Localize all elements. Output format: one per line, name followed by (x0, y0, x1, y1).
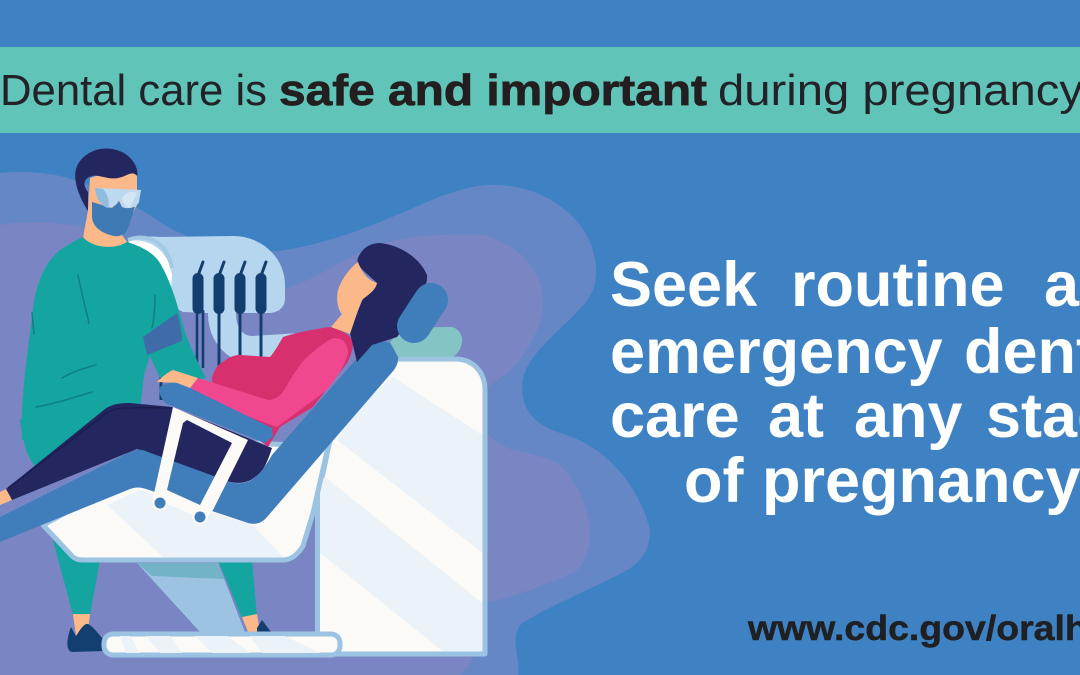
background blob: outer (0, 172, 650, 675)
main message (610, 250, 1080, 516)
patient hair (350, 243, 427, 362)
banner text: bold emphasis: safe and important (279, 66, 707, 115)
line 4: pregnancy (762, 446, 1080, 516)
foot plate (104, 634, 340, 655)
line 2: emergency (610, 317, 943, 387)
banner (0, 47, 1080, 133)
armrest frame (152, 407, 248, 524)
line 4: of (684, 446, 744, 516)
headrest (414, 300, 431, 326)
patient face (331, 262, 377, 334)
hair (75, 148, 137, 211)
dentist hand (157, 370, 198, 388)
background blob: inner (0, 222, 590, 675)
dentist legs (53, 540, 271, 652)
patient torso (212, 327, 353, 447)
chair cushion and backrest (0, 341, 398, 542)
teal scrub top (22, 237, 206, 440)
chair seat (43, 440, 328, 560)
armrest pad (160, 383, 273, 443)
line 1: routine (791, 250, 1004, 320)
dentist (20, 148, 206, 468)
safety glasses (95, 188, 141, 208)
banner text: regular end: during pregnancy (718, 66, 1080, 115)
neck and face (83, 172, 137, 248)
chair pedestal (137, 563, 245, 632)
line 3: any (854, 381, 963, 451)
dental instruments (161, 262, 266, 400)
headrest support (390, 327, 462, 357)
instrument tray (128, 236, 300, 360)
patient arm (190, 338, 348, 427)
illustration: dental chair scene (0, 148, 485, 655)
scrub fold lines (32, 275, 155, 407)
glove band (143, 313, 182, 355)
line 3: care (610, 381, 740, 451)
surgical mask (92, 201, 135, 236)
line 1: Seek (610, 250, 758, 320)
chair cabinet (318, 359, 485, 654)
patient legs (0, 403, 272, 505)
banner text: regular start: Dental care is (0, 66, 267, 115)
line 3: at (768, 381, 824, 451)
